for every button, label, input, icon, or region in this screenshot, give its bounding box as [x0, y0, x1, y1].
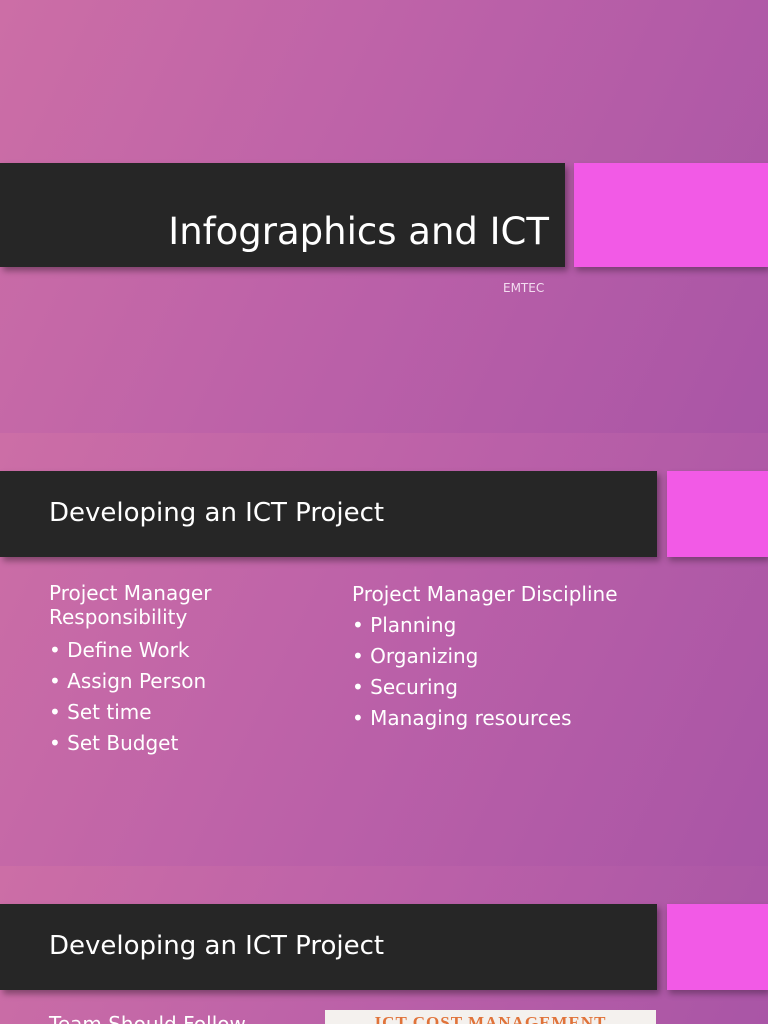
pink accent box: [667, 471, 768, 557]
title bar: [0, 163, 565, 267]
right column text: Project Manager Discipline: [352, 582, 618, 606]
left column text: Responsibility: [49, 605, 187, 629]
pink accent box: [574, 163, 768, 267]
slide 1: [0, 0, 768, 433]
right column text: • Organizing: [352, 644, 478, 668]
right column text: • Planning: [352, 613, 456, 637]
right column text: • Managing resources: [352, 706, 572, 730]
title bar: Infographics and ICT: [168, 210, 549, 253]
left column text: • Set Budget: [49, 731, 178, 755]
right column text: • Securing: [352, 675, 458, 699]
title bar: Developing an ICT Project: [49, 498, 384, 528]
right column text: [352, 582, 618, 730]
title bar: [0, 904, 657, 990]
title bar: [0, 471, 657, 557]
image: ICT cost management: [325, 1010, 656, 1024]
left column text: Project Manager: [49, 581, 211, 605]
slide 3: [0, 866, 768, 1024]
title bar: Developing an ICT Project: [49, 931, 384, 961]
left column text: • Define Work: [49, 638, 189, 662]
slide 2: [0, 433, 768, 866]
pink accent box: [667, 904, 768, 990]
left column text: • Set time: [49, 700, 152, 724]
subtitle: EMTEC: [503, 281, 544, 295]
left column text: [49, 581, 212, 755]
left column text: • Assign Person: [49, 669, 206, 693]
